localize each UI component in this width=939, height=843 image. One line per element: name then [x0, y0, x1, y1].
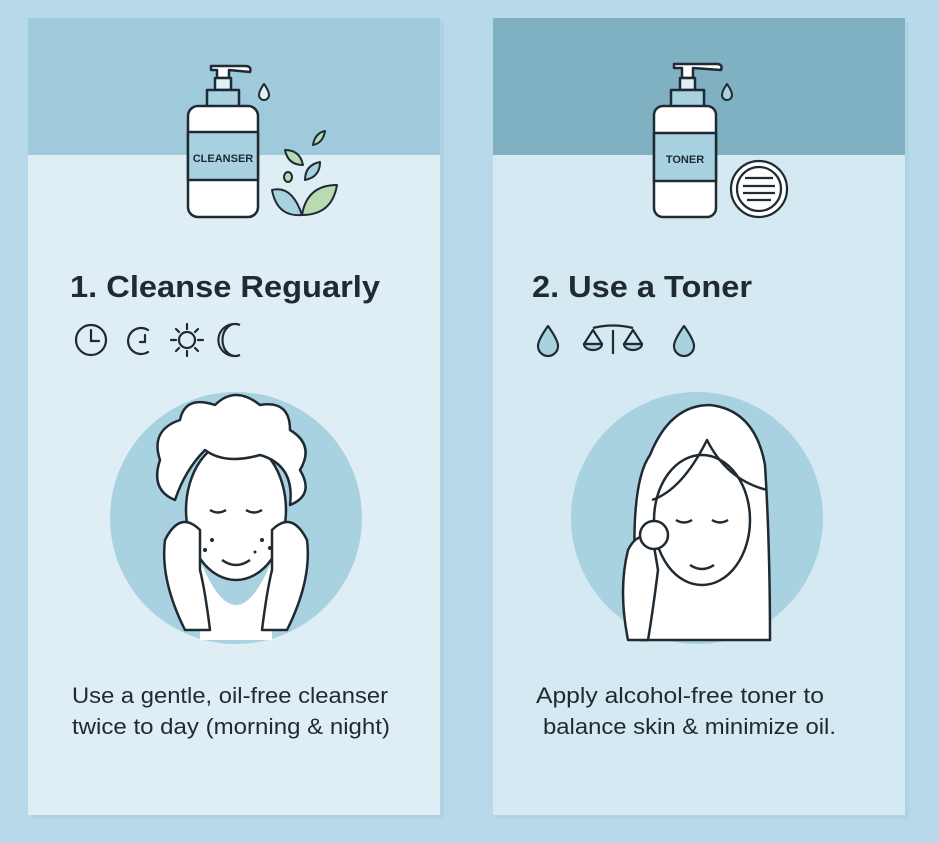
- text: cleanse description: Use a gentle, oil-free cleanser: [72, 683, 388, 708]
- text: toner description: Apply alcohol-free toner to: [536, 683, 824, 708]
- panel: cleanse: CLEANSER: [193, 153, 253, 165]
- icon: cleanser bottle: [188, 66, 269, 217]
- heading: toner: 2. Use a Toner: [532, 269, 752, 304]
- icons: clock sun moon: [76, 324, 240, 356]
- heading: cleanse: 1. Cleanse Reguarly: [70, 269, 381, 304]
- panel: toner: [493, 18, 909, 819]
- text: toner description: balance skin & minimize oil.: [543, 714, 836, 739]
- illustration: toner face: [571, 392, 823, 644]
- panel: cleanse: [28, 18, 444, 819]
- icons: drops and scale: [538, 326, 694, 356]
- illustration: face washing: [110, 392, 362, 644]
- icon: cotton pad: [731, 161, 787, 217]
- icon: leaves: [272, 131, 337, 215]
- icon: toner bottle: [654, 64, 732, 217]
- text: cleanse description: twice to day (morning & night): [72, 714, 390, 739]
- panel: toner: TONER: [666, 154, 704, 166]
